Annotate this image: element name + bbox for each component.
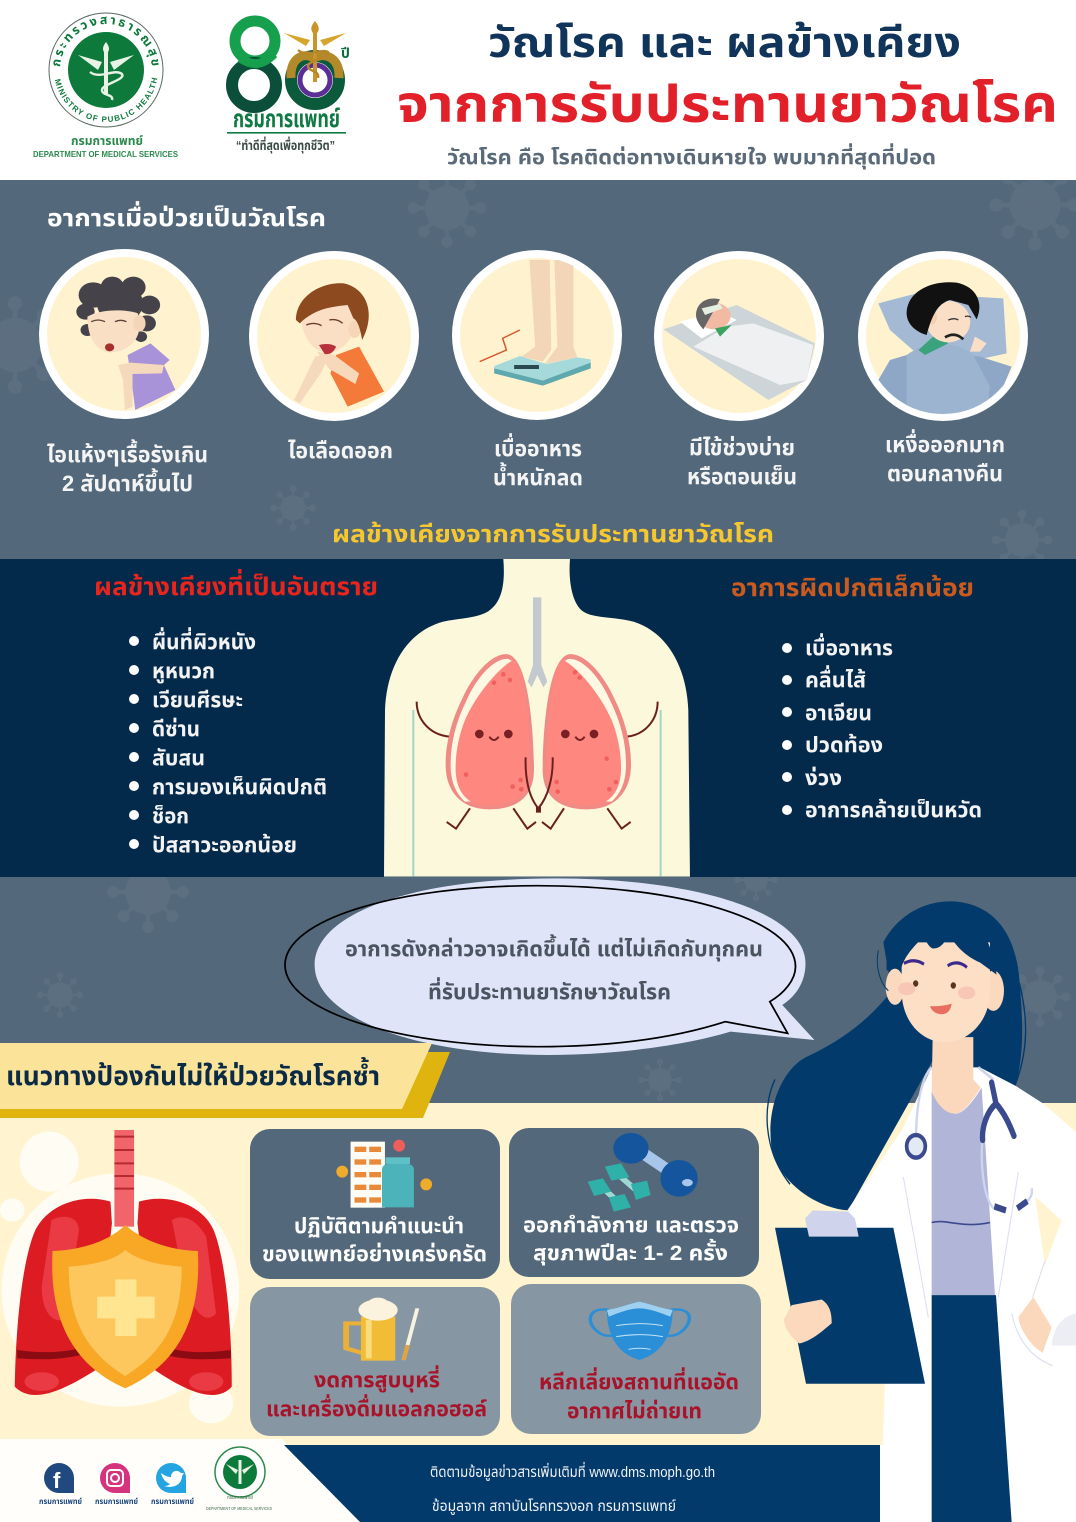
serious side effects list: หูหนวก — [152, 660, 215, 684]
caption — [47, 439, 208, 496]
caption: หรือตอนเย็น — [687, 464, 797, 489]
symptom: weight loss — [456, 254, 618, 490]
minor side effects list: ง่วง — [805, 767, 842, 790]
minor side effects list: อาการคล้ายเป็นหวัด — [805, 799, 982, 822]
minor side effects list — [731, 574, 982, 822]
serious side effects list — [94, 569, 378, 857]
footer text: ติดตามข้อมูลข่าวสารเพิ่มเติมที่ www.dms.moph.go.th — [430, 1461, 715, 1481]
caption — [493, 433, 583, 490]
caption: เหงื่อออกมาก — [885, 429, 1005, 457]
logo: 80 years department of medical services — [227, 21, 350, 153]
title: จากการรับประทานยาวัณโรค — [397, 76, 1058, 134]
heading banner: prevention: แนวทางป้องกันไม่ให้ป่วยวัณโรคซ้ำ — [6, 1057, 380, 1091]
panel: side effects — [0, 559, 1076, 877]
logo: 80 years department of medical services: ปี — [341, 45, 350, 61]
minor side effects list: อาการผิดปกติเล็กน้อย — [731, 574, 974, 602]
heading: side effects: ผลข้างเคียงจากการรับประทานยาวัณโรค — [332, 520, 774, 548]
caption: เบื่ออาหาร — [494, 433, 582, 461]
card: no smoking or alcohol — [250, 1287, 500, 1436]
card: exercise and check-ups: สุขภาพปีละ 1- 2 ครั้ง — [533, 1239, 728, 1266]
logo: 80 years department of medical services: “ทำดีที่สุดเพื่อทุกชีวิต” — [236, 136, 335, 153]
icon: pills and bottle — [336, 1140, 432, 1208]
logo: small department emblem: DEPARTMENT OF MEDICAL SERVICES — [206, 1506, 272, 1511]
serious side effects list: ช็อก — [152, 805, 189, 828]
logo: 80 years department of medical services: กรมการแพทย์ — [233, 105, 340, 133]
logo: ministry of public health emblem: DEPARTMENT OF MEDICAL SERVICES — [33, 149, 178, 159]
icon: dumbbells — [588, 1133, 698, 1212]
panel: doctor advice background — [0, 877, 1076, 1103]
heading: symptoms: อาการเมื่อป่วยเป็นวัณโรค — [47, 201, 326, 232]
footer text — [430, 1461, 715, 1515]
icon: twitter: กรมการแพทย์ — [151, 1497, 194, 1506]
logo: ministry of public health emblem: กระทรวงสาธารณสุข — [53, 16, 159, 66]
card: follow doctor's advice: ปฏิบัติตามคำแนะนำ — [294, 1215, 464, 1238]
serious side effects list: ปัสสาวะออกน้อย — [152, 834, 297, 857]
caption: ไอเลือดออก — [288, 438, 393, 463]
logo: small department emblem — [206, 1447, 272, 1511]
logo: ministry of public health emblem: MINISTRY OF PUBLIC HEALTH — [54, 78, 158, 122]
footer text: ข้อมูลจาก สถาบันโรคทรวงอก กรมการแพทย์ — [432, 1498, 676, 1515]
panel: symptoms of tuberculosis — [0, 162, 1076, 569]
icon: face mask — [590, 1302, 689, 1360]
symptom: afternoon fever — [658, 255, 820, 489]
icon: facebook — [39, 1463, 82, 1506]
symptom: night sweats — [862, 255, 1024, 486]
symptom: coughing blood — [253, 255, 415, 463]
serious side effects list: ดีซ่าน — [152, 718, 200, 741]
minor side effects list: เบื่ออาหาร — [805, 633, 893, 660]
card: avoid crowded places: อากาศไม่ถ่ายเท — [567, 1400, 702, 1423]
logo: ministry of public health emblem — [33, 12, 178, 159]
icon: beer and cigarette — [346, 1298, 417, 1361]
subtitle: วัณโรค คือ โรคติดต่อทางเดินหายใจ พบมากที่สุดที่ปอด — [447, 143, 936, 169]
caption: 2 สัปดาห์ขึ้นไป — [62, 468, 193, 496]
speech bubble: ที่รับประทานยารักษาวัณโรค — [428, 977, 671, 1004]
card: follow doctor's advice: ของแพทย์อย่างเคร่งครัด — [262, 1243, 487, 1266]
icon: facebook: f — [53, 1468, 61, 1493]
caption: มีไข้ช่วงบ่าย — [689, 435, 795, 460]
panel: header — [33, 12, 1058, 170]
serious side effects list: ผื่นที่ผิวหนัง — [152, 627, 256, 654]
card: avoid crowded places: หลีกเลี่ยงสถานที่แออัด — [539, 1367, 739, 1394]
speech bubble: อาการดังกล่าวอาจเกิดขึ้นได้ แต่ไม่เกิดกับทุกคน — [345, 934, 763, 962]
speech bubble — [285, 878, 814, 1055]
symptom: dry cough — [43, 253, 208, 496]
card: no smoking or alcohol: งดการสูบบุหรี่ — [314, 1365, 440, 1393]
panel: footer — [0, 1439, 880, 1522]
illustration: lungs with shield — [0, 1130, 239, 1423]
caption: น้ำหนักลด — [493, 462, 583, 490]
card: avoid crowded places — [511, 1284, 761, 1434]
caption — [687, 435, 797, 489]
serious side effects list: การมองเห็นผิดปกติ — [152, 776, 327, 799]
icon: facebook: กรมการแพทย์ — [39, 1497, 82, 1506]
logo: small department emblem: กรมการแพทย์ — [227, 1495, 253, 1501]
title — [397, 19, 1058, 134]
caption: ไอแห้งๆเรื้อรังเกิน — [47, 439, 208, 467]
caption — [885, 429, 1005, 486]
minor side effects list: ปวดท้อง — [805, 734, 883, 757]
illustration: body with happy lungs — [384, 559, 690, 877]
card: exercise and check-ups: ออกกำลังกาย และตรวจ — [523, 1214, 739, 1237]
panel: prevention background — [0, 878, 1076, 1445]
heading banner: prevention — [0, 1043, 450, 1118]
icon: instagram: กรมการแพทย์ — [95, 1497, 138, 1506]
caption: ตอนกลางคืน — [887, 461, 1003, 486]
serious side effects list: เวียนศีรษะ — [152, 689, 243, 712]
minor side effects list: อาเจียน — [805, 702, 872, 725]
logo: ministry of public health emblem: กรมการแพทย์ — [71, 134, 143, 148]
card: no smoking or alcohol: และเครื่องดื่มแอลกอฮอล์ — [266, 1394, 487, 1421]
serious side effects list: ผลข้างเคียงที่เป็นอันตราย — [94, 569, 378, 601]
minor side effects list: คลื่นไส้ — [805, 665, 866, 692]
serious side effects list: สับสน — [152, 747, 205, 770]
card: exercise and check-ups — [509, 1128, 759, 1277]
illustration: doctor with clipboard — [767, 901, 1076, 1522]
card: follow doctor's advice — [250, 1129, 500, 1279]
icon: instagram — [95, 1463, 138, 1506]
title: วัณโรค และ ผลข้างเคียง — [488, 19, 961, 66]
icon: twitter — [151, 1463, 194, 1506]
